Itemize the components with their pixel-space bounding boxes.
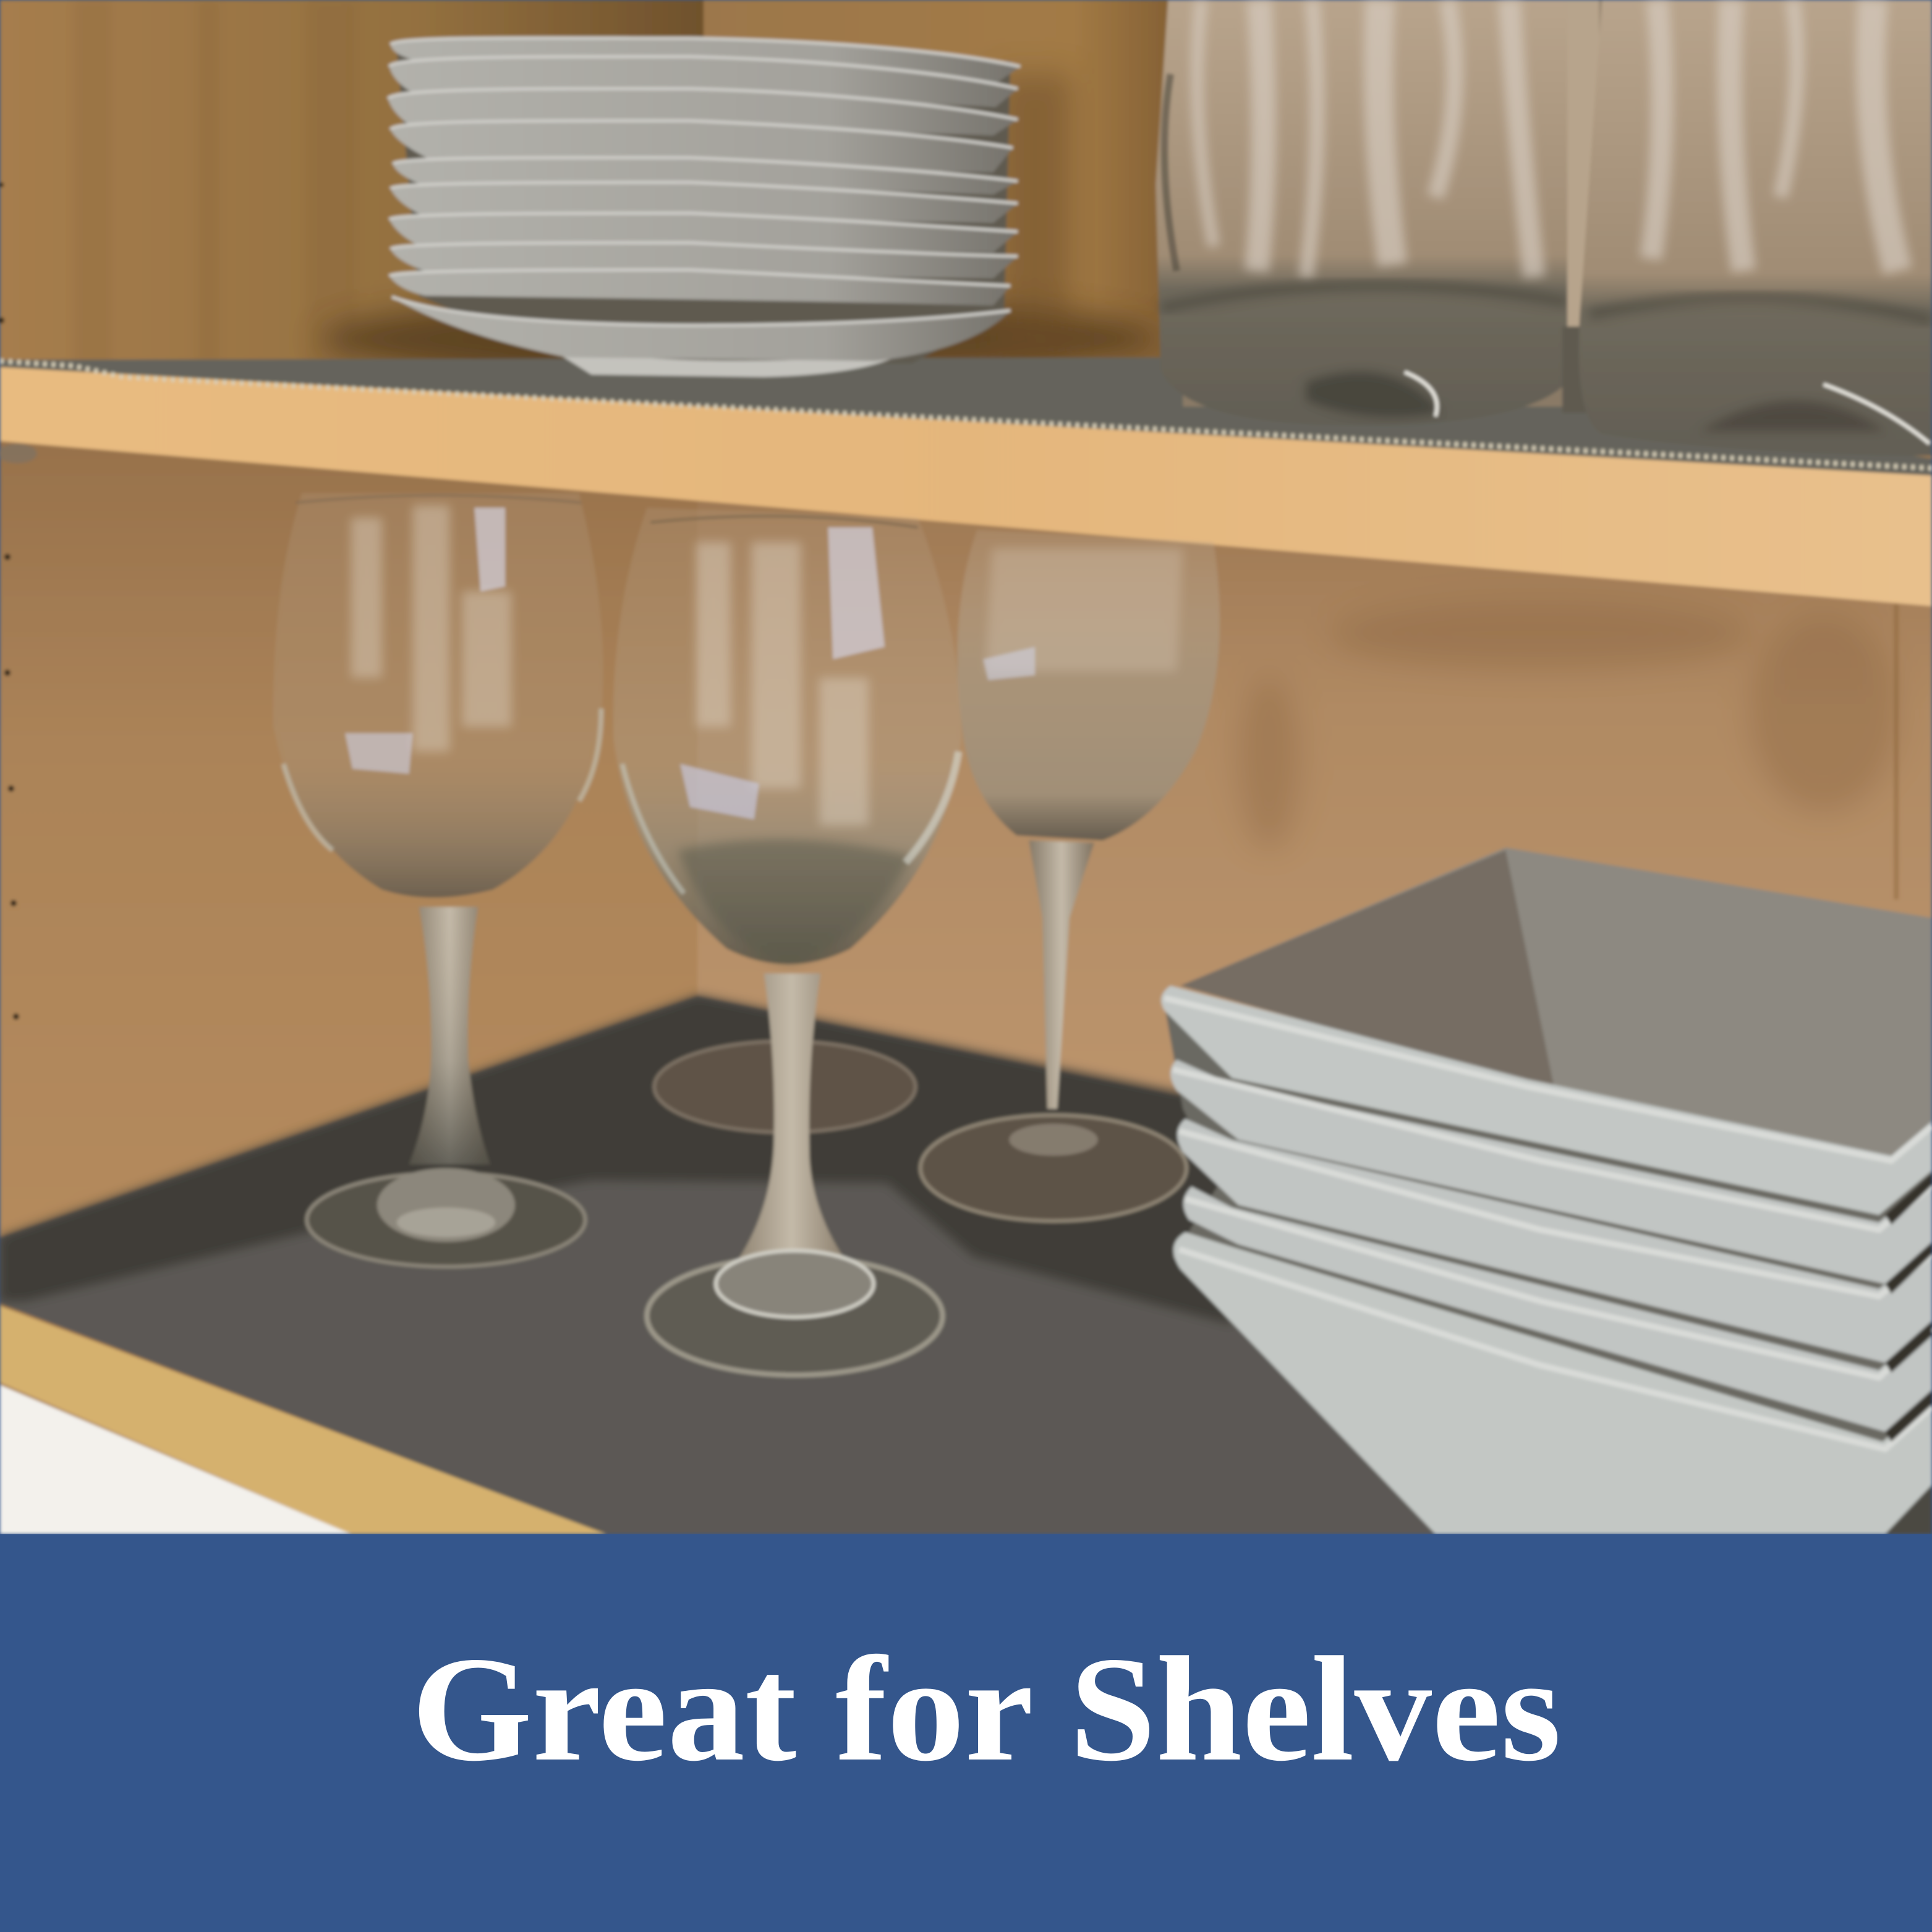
panel: shelf photo bbox=[0, 0, 1932, 1534]
tumbler gap bbox=[1567, 0, 1599, 326]
wine glass right bbox=[921, 530, 1220, 1221]
bowl stack backing bbox=[1164, 1004, 1932, 1534]
banner bbox=[0, 1534, 1932, 1932]
plate stack bbox=[388, 36, 1020, 377]
lower cabinet back wall bbox=[696, 468, 1932, 1282]
back wine glass base bbox=[654, 1041, 916, 1133]
back shadow on liner bbox=[0, 995, 1232, 1324]
tumbler left bbox=[1155, 0, 1577, 425]
tumbler left base bbox=[1306, 372, 1442, 417]
wood stains on back wall bbox=[1238, 600, 1897, 850]
lower shelf liner bbox=[0, 995, 1932, 1534]
bowl 4 bbox=[1183, 1186, 1932, 1432]
upper cabinet back wall bbox=[704, 0, 1196, 382]
shelf pin holes bbox=[0, 182, 19, 1019]
shelf liner on upper shelf bbox=[0, 357, 1932, 480]
dark shadow behind plates bbox=[320, 297, 1158, 381]
bowl 2 bbox=[1170, 1060, 1932, 1284]
wine glass center bbox=[613, 508, 961, 1375]
bowl 1 bbox=[1161, 985, 1932, 1215]
wood grain bbox=[56, 0, 357, 1269]
tumbler right bbox=[1579, 0, 1932, 456]
upper shelf front edge bbox=[0, 367, 1932, 606]
photo base bbox=[0, 0, 1932, 1534]
bracket bbox=[0, 443, 37, 463]
tumbler backing bbox=[1183, 0, 1932, 407]
square bowl stack bbox=[1161, 848, 1932, 1534]
lower cabinet left wall bbox=[0, 419, 697, 1237]
shadow at right of stack bbox=[998, 74, 1072, 370]
white counter edge bbox=[0, 1385, 351, 1534]
lower shelf front lip bbox=[0, 1306, 606, 1534]
wine glass left bbox=[273, 493, 603, 1267]
upper cabinet left wall bbox=[0, 0, 704, 382]
bowl inner bbox=[1180, 848, 1932, 1158]
bowl 3 bbox=[1177, 1119, 1932, 1363]
glass tumblers bbox=[1155, 0, 1932, 456]
banner title: Great for Shelves bbox=[412, 1625, 1561, 1792]
shelf panel seam bbox=[1894, 604, 1899, 900]
corrugated liner edge bbox=[0, 361, 1932, 468]
bowl 5 bbox=[1173, 1232, 1932, 1534]
